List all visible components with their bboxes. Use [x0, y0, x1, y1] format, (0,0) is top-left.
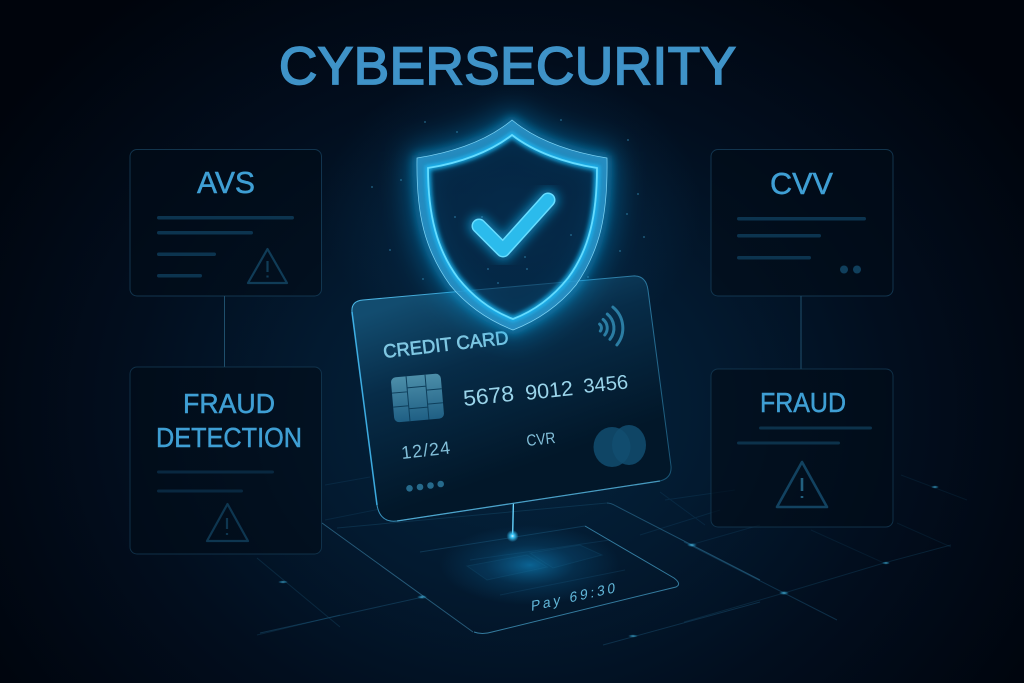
- card bottom edge highlight: [397, 481, 660, 521]
- heading: fraud detection: FRAUD: [183, 388, 275, 419]
- sparkle particles: [371, 119, 645, 284]
- shield inner fill: [428, 135, 597, 319]
- panel: fraud detection: [130, 367, 322, 554]
- expiry date: 12/24: [400, 438, 451, 463]
- heading: AVS: AVS: [197, 165, 255, 200]
- connection beam: [506, 503, 518, 542]
- cvv label: CVR: [526, 430, 556, 450]
- connector: CVV to fraud: [800, 296, 802, 369]
- payment terminal pad: [440, 525, 679, 634]
- icon: contactless waves: [598, 306, 625, 346]
- icon: two dots: [840, 266, 861, 274]
- pay amount label: Pay 69:30: [531, 580, 615, 615]
- icon: card network circles: [594, 425, 646, 467]
- text lines: [737, 217, 866, 260]
- panel: AVS: [130, 150, 322, 296]
- icon: card chip: [391, 373, 444, 423]
- panel: fraud: [711, 369, 893, 527]
- card number: [462, 371, 629, 411]
- heading: fraud detection: DETECTION: [156, 422, 302, 453]
- panel: CVV: [711, 150, 893, 296]
- floor node lights: [278, 486, 939, 638]
- card label: CREDIT CARD: [382, 328, 510, 363]
- shield inner glow line: [428, 135, 597, 319]
- card number: 9012: [524, 377, 574, 405]
- card number: 5678: [462, 381, 515, 411]
- text lines: [157, 216, 294, 278]
- icon: warning triangle: [207, 504, 248, 541]
- text lines: [157, 470, 274, 492]
- icon: check mark: [479, 200, 548, 250]
- masked digit dots: [406, 481, 444, 492]
- title: CYBERSECURITY: [279, 37, 736, 96]
- connector: AVS to fraud detection: [224, 296, 226, 367]
- heading: fraud: FRAUD: [760, 387, 846, 418]
- icon: warning triangle: [777, 462, 827, 507]
- card left edge highlight: [352, 312, 377, 505]
- heading: CVV: CVV: [770, 166, 833, 201]
- text lines: [737, 426, 872, 444]
- credit card: [352, 276, 671, 521]
- floor grid: [257, 475, 967, 645]
- card number: 3456: [582, 371, 629, 398]
- icon: warning triangle: [248, 249, 287, 283]
- heading: fraud detection: [156, 388, 302, 453]
- shield band: [417, 120, 607, 330]
- shield tight glow: [417, 120, 607, 330]
- shield glow: [417, 120, 607, 330]
- shield: [417, 120, 607, 330]
